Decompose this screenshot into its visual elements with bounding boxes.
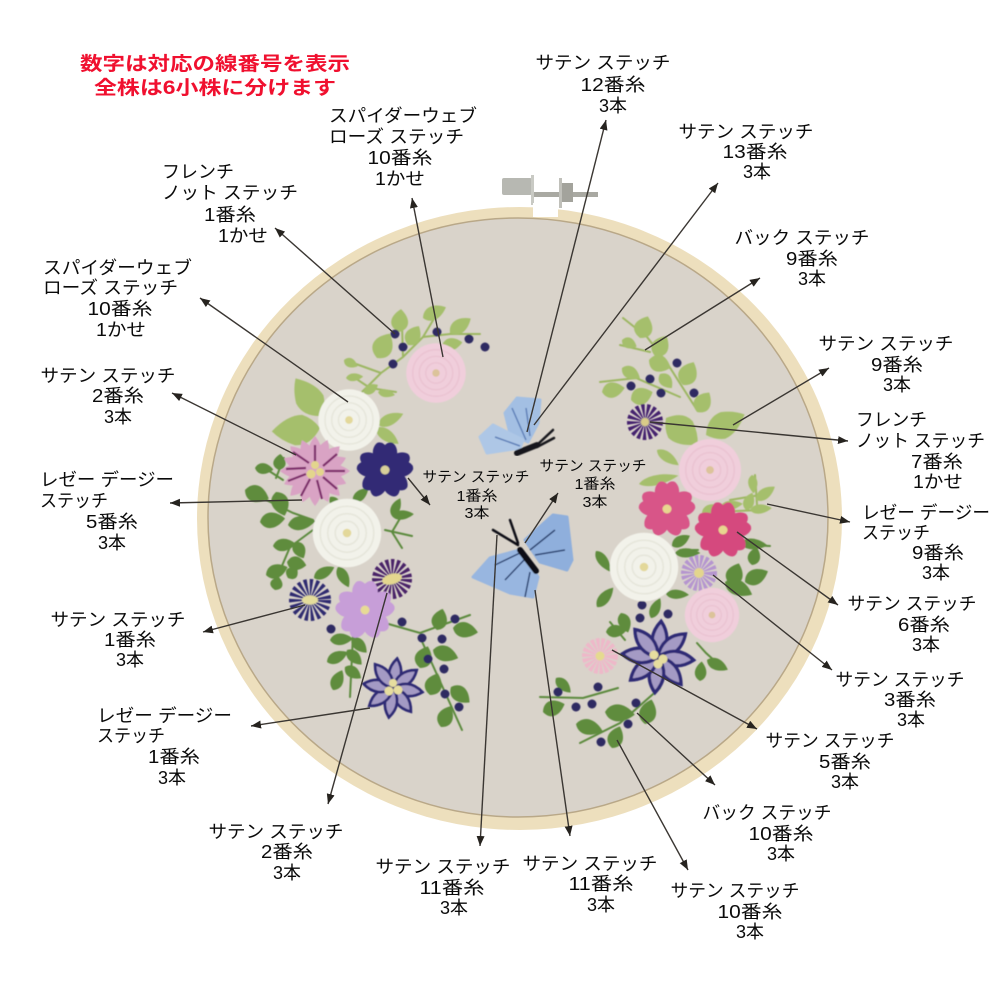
- label: back 9: 9番糸: [786, 249, 838, 269]
- label: satin 3: サテン ステッチ: [836, 670, 964, 690]
- label: satin 10: 10番糸: [718, 902, 782, 922]
- label: french 7: [856, 410, 985, 492]
- label: spider web rose top: ローズ ステッチ: [329, 127, 464, 147]
- label: back 9: [734, 228, 870, 289]
- label: lazy daisy 1: 3本: [158, 768, 186, 788]
- lower-left sprigs: [325, 607, 479, 730]
- label: satin 3: 3番糸: [884, 690, 936, 710]
- label: lazy daisy 5: 5番糸: [86, 512, 138, 532]
- label: centre left satin 1: [422, 470, 530, 522]
- label: satin 13: [678, 122, 814, 182]
- aster: pink: [590, 646, 610, 666]
- label: satin 11 right: [522, 854, 658, 915]
- label: lazy daisy 5: [40, 470, 174, 553]
- dark green left sprigs: [242, 453, 414, 592]
- light green upper sprig: [342, 301, 480, 399]
- title note: 全株は6小株に分けます: [94, 77, 336, 99]
- label: satin 13: 3本: [743, 162, 771, 182]
- flower: navy outlined petals: [359, 654, 427, 722]
- rose: pink: [406, 343, 466, 403]
- label: spider web rose top: 10番糸: [368, 148, 432, 168]
- label: lazy daisy 9: [862, 503, 990, 583]
- title note: [80, 53, 350, 99]
- label: centre left satin 1: 3本: [464, 505, 490, 522]
- label: satin 12: 3本: [599, 96, 627, 116]
- fabric: [208, 218, 828, 817]
- label: satin 2 lower: [208, 822, 344, 883]
- label: satin 11 left: 3本: [440, 898, 468, 918]
- label: french 7: ノット ステッチ: [856, 431, 985, 451]
- label: lazy daisy 9: ステッチ: [862, 523, 930, 543]
- label: satin 1: サテン ステッチ: [50, 610, 186, 630]
- title note: 数字は対応の線番号を表示: [80, 53, 350, 75]
- label: french 7: 7番糸: [911, 452, 963, 472]
- label: satin 9: サテン ステッチ: [818, 334, 954, 354]
- label: french 7: フレンチ: [856, 410, 927, 430]
- butterfly: lower: [473, 515, 572, 597]
- label: spider web rose left: 10番糸: [88, 299, 152, 319]
- label: satin 11 right: サテン ステッチ: [522, 854, 658, 874]
- label: back 9: バック ステッチ: [734, 228, 870, 248]
- label: satin 11 left: 11番糸: [420, 878, 484, 898]
- label: centre right satin 1: 3本: [582, 494, 608, 511]
- label: satin 2 upper: 3本: [104, 407, 132, 427]
- rose: pink upper: [679, 439, 741, 501]
- label: lazy daisy 1: ステッチ: [97, 726, 165, 746]
- label: lazy daisy 5: ステッチ: [40, 491, 108, 511]
- label: french 1: 1番糸: [204, 205, 256, 225]
- label: spider web rose left: 1かせ: [96, 320, 146, 340]
- flower: lilac: [333, 581, 397, 641]
- label: satin 11 left: サテン ステッチ: [376, 857, 510, 877]
- embroidery hoop: [197, 175, 842, 830]
- label: satin 2 upper: サテン ステッチ: [40, 366, 176, 386]
- label: satin 9: 9番糸: [871, 355, 923, 375]
- label: french 1: 1かせ: [218, 226, 268, 246]
- label: satin 5: [766, 731, 894, 792]
- label: centre left satin 1: サテン ステッチ: [422, 470, 530, 486]
- aster: lilac: [689, 563, 709, 583]
- label: lazy daisy 9: 9番糸: [912, 543, 964, 563]
- label: french 7: 1かせ: [913, 472, 963, 492]
- label: french 1: フレンチ: [162, 162, 234, 182]
- label: satin 11 right: 11番糸: [568, 874, 634, 894]
- flower: navy outlined petals: [619, 618, 697, 696]
- label: lazy daisy 1: 1番糸: [148, 747, 200, 767]
- icon: tightening screw: [502, 175, 598, 208]
- embroidery: left wreath: [242, 301, 490, 730]
- label: spider web rose left: ローズ ステッチ: [43, 278, 178, 298]
- label: back 10: バック ステッチ: [702, 803, 832, 823]
- label: satin 13: サテン ステッチ: [678, 122, 814, 142]
- label: back 10: [702, 803, 832, 864]
- flower: magenta right: [693, 502, 753, 560]
- screw gap: [533, 203, 558, 217]
- label: satin 9: 3本: [883, 375, 911, 395]
- label: french 1: ノット ステッチ: [162, 183, 298, 203]
- label: satin 3: [836, 670, 964, 730]
- rose: white: [610, 533, 678, 601]
- label: satin 2 upper: 2番糸: [92, 386, 144, 406]
- label: satin 10: 3本: [736, 922, 764, 942]
- label: satin 6: 6番糸: [898, 615, 950, 635]
- leader arrows: [170, 120, 850, 870]
- lower navy french knots: [398, 614, 464, 712]
- label: satin 1: [50, 610, 186, 670]
- label: satin 2 upper: [40, 366, 176, 427]
- label: centre right satin 1: 1番糸: [574, 476, 616, 493]
- label: centre right satin 1: サテン ステッチ: [540, 459, 646, 475]
- label: satin 13: 13番糸: [722, 142, 788, 162]
- label: satin 1: 3本: [116, 650, 144, 670]
- label: spider web rose left: スパイダーウェブ: [43, 257, 192, 278]
- label: spider web rose top: 1かせ: [375, 169, 425, 189]
- label: satin 10: サテン ステッチ: [670, 881, 800, 901]
- label: lazy daisy 1: レゼー デージー: [97, 706, 232, 726]
- navy french knots: [626, 358, 698, 622]
- label: back 9: 3本: [798, 269, 826, 289]
- navy french knots: [326, 328, 490, 634]
- label: lazy daisy 9: 3本: [922, 563, 950, 583]
- label: satin 12: サテン ステッチ: [536, 53, 670, 73]
- label: lazy daisy 9: レゼー デージー: [862, 503, 990, 523]
- flower: magenta left: [637, 481, 697, 539]
- label: satin 2 lower: サテン ステッチ: [208, 822, 344, 842]
- dark green leaves: [540, 531, 771, 751]
- label: spider web rose top: スパイダーウェブ: [329, 105, 477, 126]
- label: spider web rose left: [43, 257, 192, 340]
- daisy: pink with purple stripes: [271, 427, 359, 515]
- label: lazy daisy 5: 3本: [98, 533, 126, 553]
- label: centre left satin 1: 1番糸: [456, 488, 498, 505]
- label: satin 5: サテン ステッチ: [766, 731, 894, 751]
- label: satin 6: [848, 594, 976, 655]
- label: back 10: 3本: [767, 844, 795, 864]
- label: satin 6: サテン ステッチ: [848, 594, 976, 614]
- hoop ring: [197, 207, 842, 830]
- rose: white upper: [318, 389, 380, 451]
- label: satin 6: 3本: [912, 635, 940, 655]
- label: lazy daisy 5: レゼー デージー: [40, 470, 174, 490]
- rose: pink lower: [685, 588, 739, 642]
- light green upper sprig: [600, 313, 778, 517]
- butterfly: upper: [480, 398, 554, 453]
- label: centre right satin 1: [540, 459, 646, 511]
- label: spider web rose top: [329, 105, 477, 189]
- aster: purple: [380, 568, 404, 590]
- aster: purple: [635, 412, 655, 432]
- label: satin 10: [670, 881, 800, 942]
- label: satin 9: [818, 334, 954, 395]
- label: back 10: 10番糸: [748, 824, 814, 844]
- label: satin 2 lower: 2番糸: [261, 842, 313, 862]
- rose: white lower: [313, 499, 381, 567]
- label: satin 5: 3本: [831, 772, 859, 792]
- label: satin 5: 5番糸: [819, 752, 871, 772]
- label: satin 12: 12番糸: [580, 75, 646, 95]
- aster: navy: [298, 588, 322, 612]
- embroidery: right wreath: [540, 313, 778, 751]
- label: satin 2 lower: 3本: [273, 863, 301, 883]
- label: satin 12: [536, 53, 670, 116]
- label: satin 3: 3本: [897, 710, 925, 730]
- label: lazy daisy 1: [97, 706, 232, 788]
- big light leaves: [271, 371, 406, 448]
- label: french 1: [162, 162, 298, 246]
- label: satin 1: 1番糸: [104, 630, 156, 650]
- lower navy french knots: [554, 682, 640, 746]
- flower: navy five-petal: [355, 442, 415, 500]
- label: satin 11 right: 3本: [587, 895, 615, 915]
- label: satin 11 left: [376, 857, 510, 918]
